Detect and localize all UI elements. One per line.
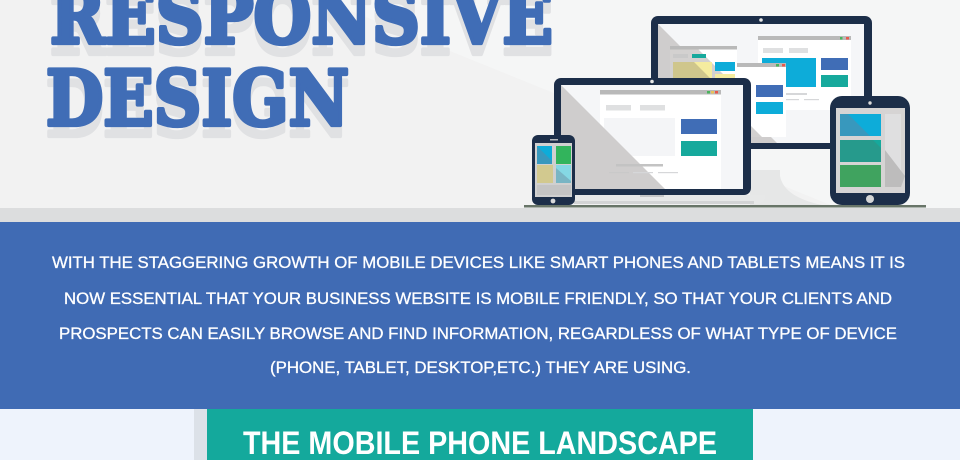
icon: desktop monitor xyxy=(651,16,872,205)
intro text: WITH THE STAGGERING GROWTH OF MOBILE DEVICES LIKE SMART PHONES AND TABLETS MEANS IT IS xyxy=(52,254,905,272)
monitor window: center xyxy=(737,63,786,137)
panel: intro xyxy=(0,222,960,409)
shelf line xyxy=(524,205,926,208)
icon: tablet xyxy=(830,96,910,205)
lower section background xyxy=(0,409,960,460)
intro text: NOW ESSENTIAL THAT YOUR BUSINESS WEBSITE IS MOBILE FRIENDLY, SO THAT YOUR CLIENTS AND xyxy=(64,290,892,308)
icon: smartphone xyxy=(532,135,575,205)
title: DESIGN xyxy=(46,55,349,143)
banner shadow xyxy=(194,409,208,460)
monitor window: left xyxy=(670,46,737,89)
hero background xyxy=(0,0,960,208)
title xyxy=(46,0,553,143)
intro text: PROSPECTS CAN EASILY BROWSE AND FIND INFORMATION, REGARDLESS OF WHAT TYPE OF DEVICE xyxy=(59,325,897,343)
intro text xyxy=(52,254,905,377)
device illustration xyxy=(524,16,926,208)
title shadow: DESIGN xyxy=(46,66,349,154)
intro text: (PHONE, TABLET, DESKTOP,ETC.) THEY ARE USING. xyxy=(270,359,691,377)
counter band xyxy=(0,208,960,222)
title shadow xyxy=(46,0,553,154)
banner: the mobile phone landscape xyxy=(207,409,753,460)
monitor window: right xyxy=(758,36,851,110)
icon: laptop xyxy=(554,78,765,204)
banner: the mobile phone landscape: THE MOBILE PHONE LANDSCAPE xyxy=(243,425,717,460)
